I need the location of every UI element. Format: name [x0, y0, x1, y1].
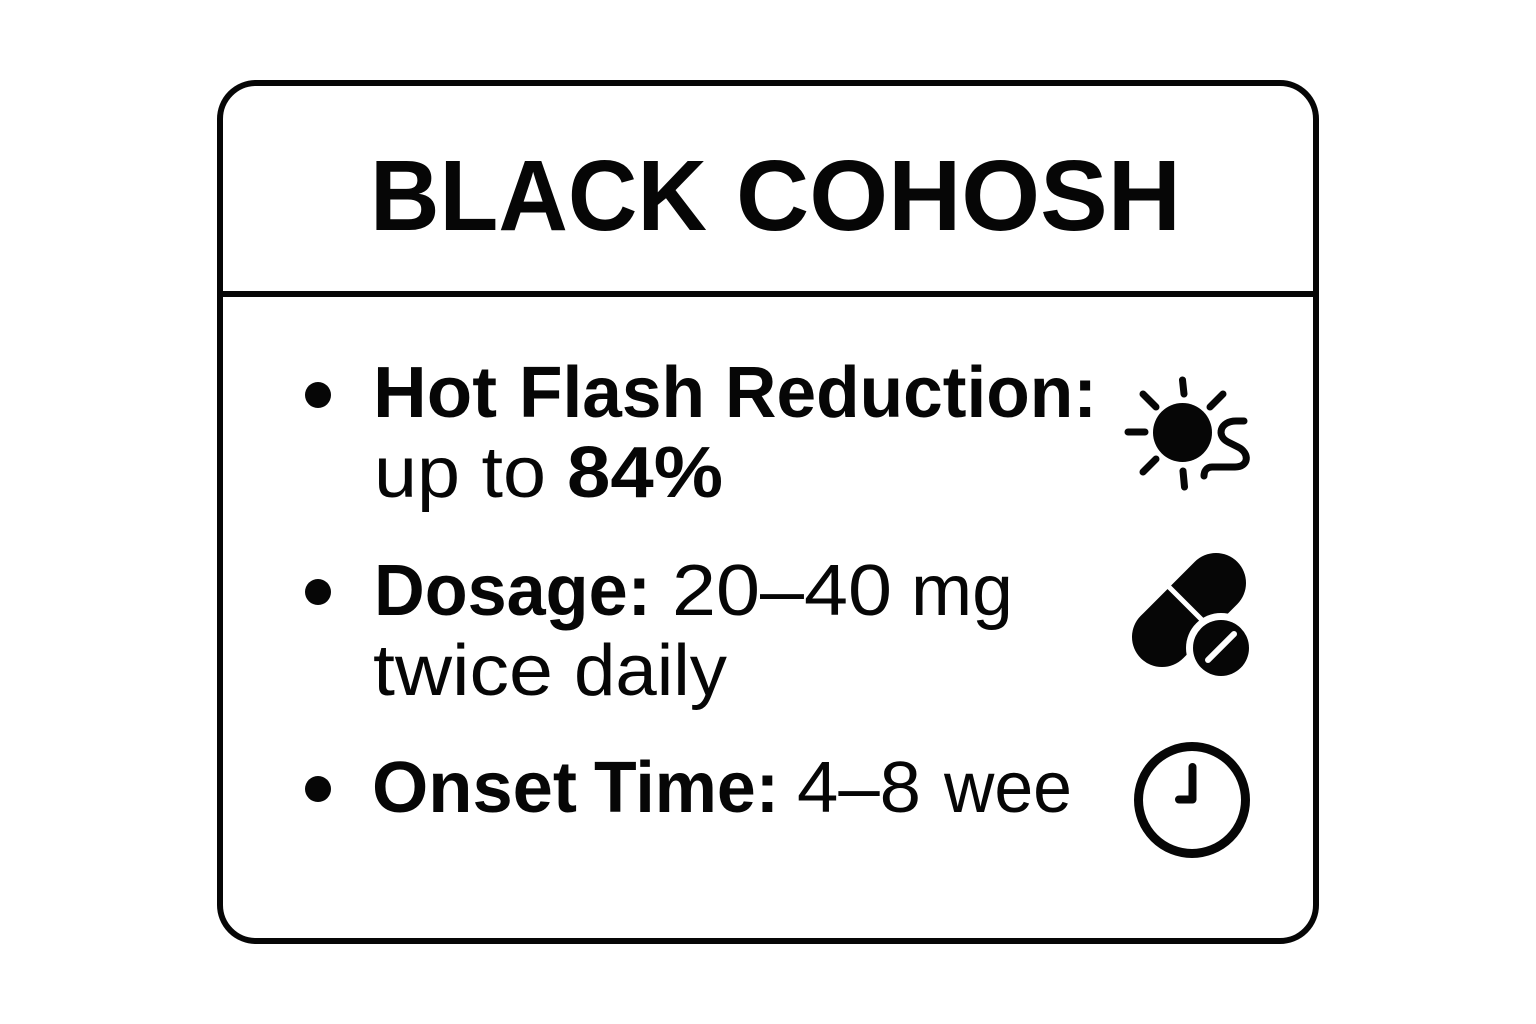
bullet: onset time — [305, 748, 1072, 828]
icon: sun with heat wave — [1128, 380, 1246, 487]
bullet: hot flash reduction: Reduction: — [725, 353, 1097, 433]
icon: clock — [1138, 746, 1246, 854]
bullet: dosage — [305, 551, 1013, 711]
bullet: onset time: 4–8 — [797, 748, 921, 828]
bullet: onset time: Onset — [372, 748, 577, 828]
bullet: onset time: wee — [943, 748, 1072, 828]
title — [370, 140, 1181, 252]
bullet: dosage: twice — [373, 631, 553, 711]
bullet: dosage: daily — [574, 631, 727, 711]
bullet: hot flash reduction: 84% — [567, 433, 723, 513]
bullet: hot flash reduction: up to — [374, 433, 546, 513]
bullet: hot flash reduction — [305, 353, 1097, 513]
bullet: hot flash reduction: Hot — [373, 353, 497, 433]
panel: card — [220, 83, 1316, 941]
bullet: hot flash reduction: Flash — [519, 353, 705, 433]
title: COHOSH — [736, 140, 1181, 252]
bullet: dosage: mg — [911, 551, 1013, 631]
bullet: dosage: Dosage: — [374, 551, 651, 631]
bullet: onset time: Time: — [594, 748, 779, 828]
bullet: dosage: 20–40 — [672, 551, 892, 631]
icon: pills — [1162, 583, 1256, 683]
title: BLACK — [370, 140, 707, 252]
